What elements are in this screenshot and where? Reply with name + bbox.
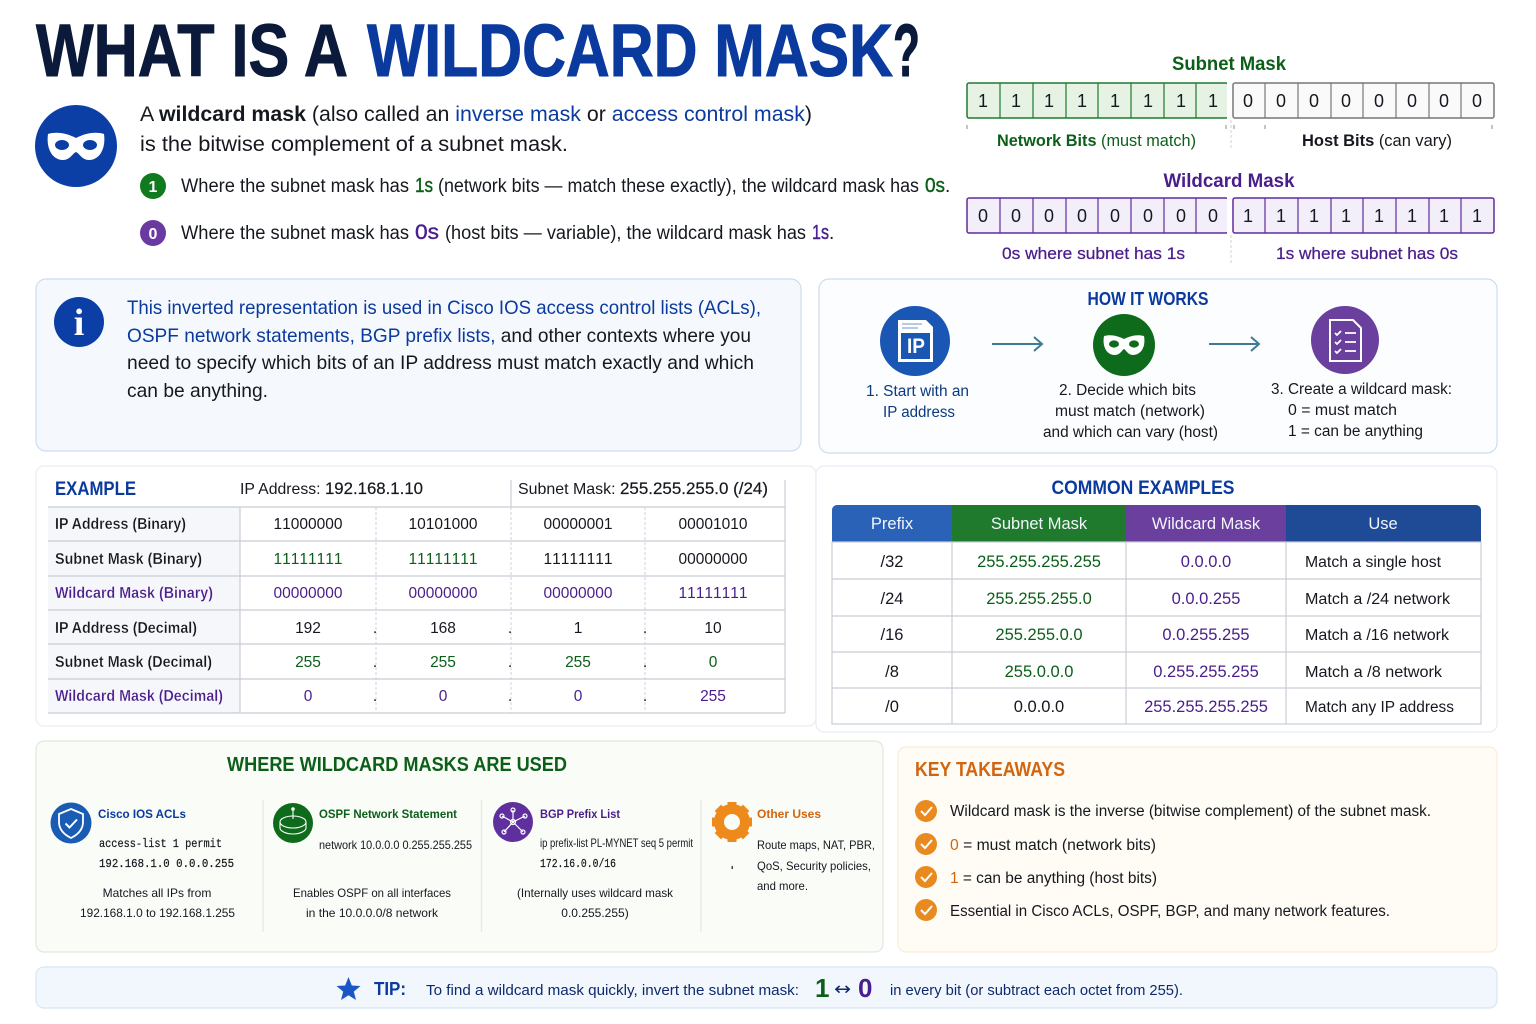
panel: subnet mask bits: 1 xyxy=(1044,91,1054,111)
panel: wildcard mask bits: 0 xyxy=(1044,206,1054,226)
tip text: TIP: xyxy=(374,979,406,999)
step 1 text xyxy=(866,383,969,421)
example table: 10 xyxy=(704,620,722,637)
bullet: subnet zeros: 0 xyxy=(149,226,158,243)
tip text: 1 xyxy=(815,973,829,1003)
icon: IP document xyxy=(880,306,950,376)
example table: . xyxy=(373,620,377,637)
common examples table: Match a /24 network xyxy=(1305,591,1450,608)
example table: 0 xyxy=(709,654,718,671)
panel: info note: i xyxy=(74,302,84,344)
common examples table xyxy=(832,505,1481,724)
example ip address: IP Address: 192.168.1.10 xyxy=(240,479,423,498)
panel: subnet mask bits: 0 xyxy=(1309,91,1319,111)
panel: wildcard mask bits: 0 xyxy=(1011,206,1021,226)
takeaway text: Wildcard mask is the inverse (bitwise complement) of the subnet mask. xyxy=(950,803,1431,820)
step 2 text: 2. Decide which bits xyxy=(1059,382,1196,399)
example table: . xyxy=(643,654,647,671)
column: BGP prefix list: ip prefix-list PL-MYNET seq 5 permit xyxy=(540,836,694,850)
panel: info note: This inverted representation is used in Cisco IOS access control lists (ACLs), xyxy=(127,297,761,319)
column: other uses: Route maps, NAT, PBR, xyxy=(757,838,875,852)
example table: 255 xyxy=(700,688,726,705)
example table: . xyxy=(508,654,512,671)
example table: 255 xyxy=(295,654,321,671)
tip text: To find a wildcard mask quickly, invert the subnet mask: xyxy=(426,982,799,999)
common examples table: Match any IP address xyxy=(1305,699,1454,716)
example table: 00000000 xyxy=(274,585,343,602)
panel: wildcard mask bits: 0 xyxy=(1208,206,1218,226)
panel: subnet mask bits: 0 xyxy=(1374,91,1384,111)
step 2 text: and which can vary (host) xyxy=(1043,424,1218,441)
panel: wildcard mask bits: 1 xyxy=(1439,206,1449,226)
intro text xyxy=(140,102,812,156)
panel: subnet mask bits: 0 xyxy=(1276,91,1286,111)
panel: wildcard mask bits: 0s where subnet has 1s xyxy=(1002,244,1185,263)
example table: 0 xyxy=(439,688,448,705)
bullet: subnet zeros: (host bits — variable), the wildcard mask has xyxy=(445,223,806,244)
panel: wildcard mask bits: 1 xyxy=(1341,206,1351,226)
panel: wildcard mask bits: 0 xyxy=(1143,206,1153,226)
column: Cisco IOS ACLs: Matches all IPs from xyxy=(103,886,211,900)
panel: how it works xyxy=(819,279,1497,453)
panel: subnet mask bits: 0 xyxy=(1407,91,1417,111)
panel: wildcard mask bits: 1s where subnet has 0s xyxy=(1276,244,1458,263)
key takeaways heading: KEY TAKEAWAYS xyxy=(915,759,1065,781)
panel: subnet mask bits: 0 xyxy=(1472,91,1482,111)
step 3 text: 3. Create a wildcard mask: xyxy=(1271,381,1452,398)
panel: info note: need to specify which bits of an IP address must match exactly and which xyxy=(127,352,754,374)
intro text: is the bitwise complement of a subnet mask. xyxy=(140,132,568,156)
common examples table: 0.0.255.255 xyxy=(1162,626,1250,644)
panel: subnet mask bits: Host Bits (can vary) xyxy=(1302,131,1452,150)
bullet: subnet zeros: . xyxy=(829,223,834,244)
step 3 text: 1 = can be anything xyxy=(1288,423,1423,440)
example table: 00000000 xyxy=(544,585,613,602)
example table: . xyxy=(508,620,512,637)
example table: 00000000 xyxy=(679,551,748,568)
column: OSPF network statement: Enables OSPF on all interfaces xyxy=(293,886,451,900)
panel: subnet mask bits: 0 xyxy=(1439,91,1449,111)
tip text: 0 xyxy=(858,973,872,1003)
bullet: subnet zeros: Where the subnet mask has xyxy=(181,223,409,244)
common examples table: /32 xyxy=(881,553,903,571)
bullet: subnet ones: (network bits — match these exactly), the wildcard mask has xyxy=(438,176,919,197)
panel: where wildcard masks are used xyxy=(36,741,883,952)
step 3 text: 0 = must match xyxy=(1288,402,1397,419)
example table: 11000000 xyxy=(274,516,343,533)
common examples table: Wildcard Mask xyxy=(1152,515,1261,533)
tip text xyxy=(374,973,1183,1003)
panel: info note xyxy=(36,279,801,451)
column: Cisco IOS ACLs: 192.168.1.0 to 192.168.1.255 xyxy=(80,906,235,920)
column: BGP prefix list: 0.0.255.255) xyxy=(561,906,629,920)
example table: 0 xyxy=(574,688,583,705)
panel: subnet mask bits: 0 xyxy=(1243,91,1253,111)
example table: 1 xyxy=(574,620,582,637)
common examples table: Use xyxy=(1368,515,1398,533)
icon: IP document: IP xyxy=(907,335,925,358)
common examples table: 0.0.0.0 xyxy=(1181,553,1231,571)
common examples table: 255.255.255.255 xyxy=(1144,698,1268,716)
common examples table: Match a single host xyxy=(1305,554,1442,571)
example subnet mask: Subnet Mask: 255.255.255.0 (/24) xyxy=(518,479,768,498)
panel: subnet mask bits: 1 xyxy=(1110,91,1120,111)
column: OSPF network statement xyxy=(273,803,472,920)
panel: wildcard mask bits: 0 xyxy=(1176,206,1186,226)
column: other uses: and more. xyxy=(757,879,808,893)
panel: subnet mask bits: 1 xyxy=(1077,91,1087,111)
column: BGP prefix list: (Internally uses wildcard mask xyxy=(517,886,674,900)
common examples table: 255.255.255.255 xyxy=(977,553,1101,571)
panel: wildcard mask bits: 1 xyxy=(1276,206,1286,226)
bullet: subnet ones: 1s xyxy=(415,175,433,197)
takeaway text: Essential in Cisco ACLs, OSPF, BGP, and many network features. xyxy=(950,903,1390,920)
example table: Subnet Mask (Binary) xyxy=(55,551,202,568)
common examples heading: COMMON EXAMPLES xyxy=(1052,477,1234,499)
example table xyxy=(48,480,785,713)
step 1 text: 1. Start with an xyxy=(866,383,969,400)
example table: Wildcard Mask (Decimal) xyxy=(55,688,223,705)
column: BGP prefix list xyxy=(493,802,694,920)
panel: wildcard mask bits: 1 xyxy=(1309,206,1319,226)
column: Cisco IOS ACLs: 192.168.1.0 0.0.0.255 xyxy=(99,857,234,871)
panel: info note: OSPF network statements, BGP prefix lists, and other contexts where you xyxy=(127,325,751,347)
panel: wildcard mask bits: 0 xyxy=(978,206,988,226)
arrow: step 1 to 2 xyxy=(992,337,1042,351)
panel: how it works: HOW IT WORKS xyxy=(1088,289,1208,309)
example table: . xyxy=(373,654,377,671)
arrow: step 2 to 3 xyxy=(1209,337,1259,351)
example table: Wildcard Mask (Binary) xyxy=(55,585,213,602)
panel: subnet mask bits: Network Bits (must match) xyxy=(997,131,1196,150)
bullet: subnet zeros: 1s xyxy=(812,222,829,244)
common examples table: Prefix xyxy=(871,515,914,533)
common examples table: 0.0.0.0 xyxy=(1014,698,1064,716)
panel: wildcard mask bits: Wildcard Mask xyxy=(1164,171,1295,192)
title: WHAT IS A xyxy=(36,9,348,92)
example table: 00001010 xyxy=(679,516,748,533)
step 2 text xyxy=(1043,382,1218,441)
panel: wildcard mask bits: 0 xyxy=(1077,206,1087,226)
example table: . xyxy=(373,688,377,705)
example table: . xyxy=(508,688,512,705)
takeaway checks xyxy=(915,800,937,921)
tip text: in every bit (or subtract each octet from 255). xyxy=(890,982,1183,999)
panel: common examples xyxy=(816,466,1497,732)
panel: wildcard mask bits: 1 xyxy=(1407,206,1417,226)
panel: subnet mask bits: 1 xyxy=(1176,91,1186,111)
column: other uses: Other Uses xyxy=(757,807,821,821)
icon: star xyxy=(336,977,360,1000)
example table: 11111111 xyxy=(274,551,342,568)
panel: wildcard mask bits: 1 xyxy=(1243,206,1253,226)
panel: info note: can be anything. xyxy=(127,380,268,402)
common examples table: /16 xyxy=(881,626,903,644)
panel: subnet mask bits: 1 xyxy=(978,91,988,111)
common examples table: 255.255.255.0 xyxy=(986,590,1092,608)
panel: key takeaways xyxy=(898,747,1497,952)
example table: . xyxy=(643,620,647,637)
title: ? xyxy=(893,9,920,92)
icon: blue mask xyxy=(35,105,117,187)
panel: example xyxy=(36,466,816,726)
example table: . xyxy=(643,688,647,705)
column: Cisco IOS ACLs xyxy=(50,802,235,920)
step 2 text: must match (network) xyxy=(1055,403,1205,420)
title xyxy=(36,9,920,92)
panel: subnet mask bits: Subnet Mask xyxy=(1172,54,1286,75)
common examples table: /24 xyxy=(881,590,903,608)
example table: 0 xyxy=(304,688,313,705)
example table: 11111111 xyxy=(679,585,747,602)
common examples table: Match a /16 network xyxy=(1305,627,1449,644)
panel: subnet mask bits: 1 xyxy=(1011,91,1021,111)
column: other uses: QoS, Security policies, xyxy=(757,859,871,873)
step 1 text: IP address xyxy=(883,404,955,421)
common examples table: Subnet Mask xyxy=(991,515,1088,533)
example table: 10101000 xyxy=(409,516,478,533)
example heading: EXAMPLE xyxy=(55,478,136,500)
common examples table: 0.255.255.255 xyxy=(1153,663,1259,681)
panel: wildcard mask bits: 1 xyxy=(1472,206,1482,226)
where used heading: WHERE WILDCARD MASKS ARE USED xyxy=(227,754,567,776)
panel: wildcard mask bits: 1 xyxy=(1374,206,1384,226)
example table: 00000001 xyxy=(544,516,612,533)
panel: tip xyxy=(36,967,1497,1008)
panel: subnet mask bits: 1 xyxy=(1208,91,1218,111)
common examples table: Match a /8 network xyxy=(1305,664,1442,681)
bullet: subnet ones xyxy=(140,173,950,199)
bullet: subnet ones: 0s xyxy=(925,175,945,197)
takeaway text: 0 = must match (network bits) xyxy=(950,837,1156,854)
column: Cisco IOS ACLs: Cisco IOS ACLs xyxy=(98,807,186,821)
common examples table: /8 xyxy=(885,663,899,681)
column: Cisco IOS ACLs: access-list 1 permit xyxy=(99,837,222,851)
example table: 192 xyxy=(295,620,321,637)
takeaway text xyxy=(950,803,1431,920)
panel: subnet mask bits: 0 xyxy=(1341,91,1351,111)
common examples table: 0.0.0.255 xyxy=(1172,590,1240,608)
tip text: ↔ xyxy=(834,979,851,1000)
panel: subnet mask bits xyxy=(967,54,1494,150)
common examples table: 255.0.0.0 xyxy=(1005,663,1073,681)
column: other uses xyxy=(712,802,875,893)
panel: subnet mask bits: 1 xyxy=(1143,91,1153,111)
bullet: subnet ones: 1 xyxy=(149,179,158,196)
column: OSPF network statement: in the 10.0.0.0/8 network xyxy=(306,906,439,920)
example table: 11111111 xyxy=(544,551,612,568)
column: BGP prefix list: BGP Prefix List xyxy=(540,807,620,821)
column: OSPF network statement: network 10.0.0.0 0.255.255.255 xyxy=(319,838,472,852)
example table: IP Address (Decimal) xyxy=(55,620,197,637)
example table: 00000000 xyxy=(409,585,478,602)
takeaway text: 1 = can be anything (host bits) xyxy=(950,870,1157,887)
bullet: subnet zeros xyxy=(140,220,834,246)
example table: Subnet Mask (Decimal) xyxy=(55,654,212,671)
step 3 text xyxy=(1271,381,1452,440)
title: WILDCARD MASK xyxy=(367,9,893,92)
intro text: A wildcard mask (also called an inverse mask or access control mask) xyxy=(140,102,812,126)
example table: 255 xyxy=(430,654,456,671)
common examples table: /0 xyxy=(885,698,899,716)
icon: checklist xyxy=(1311,306,1379,374)
example table: 11111111 xyxy=(409,551,477,568)
bullet: subnet ones: . xyxy=(945,176,950,197)
column: OSPF network statement: OSPF Network Statement xyxy=(319,807,457,821)
example table: 168 xyxy=(430,620,456,637)
icon: green mask xyxy=(1093,314,1155,376)
bullet: subnet ones: Where the subnet mask has xyxy=(181,176,409,197)
column: BGP prefix list: 172.16.0.0/16 xyxy=(540,857,616,871)
example table: IP Address (Binary) xyxy=(55,516,186,533)
bullet: subnet zeros: 0s xyxy=(415,221,439,244)
common examples table: 255.255.0.0 xyxy=(995,626,1083,644)
example table: 255 xyxy=(565,654,591,671)
panel: wildcard mask bits xyxy=(967,171,1494,263)
panel: wildcard mask bits: 0 xyxy=(1110,206,1120,226)
